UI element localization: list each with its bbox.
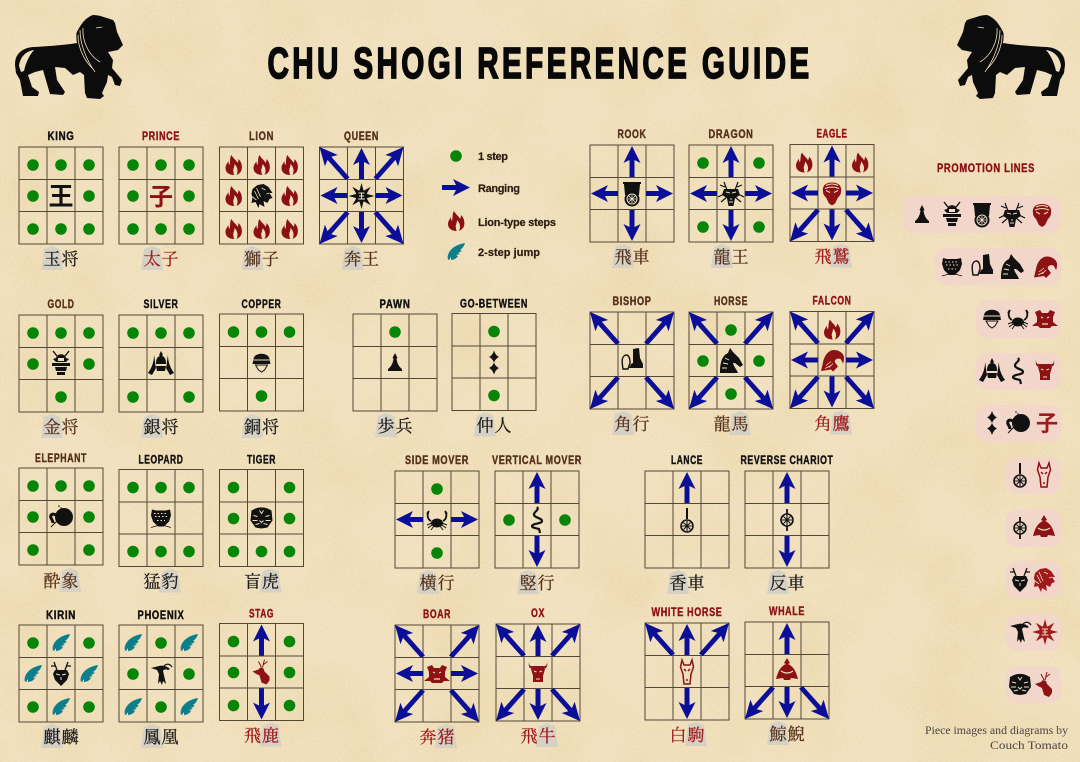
promotion line 7 <box>1006 509 1061 547</box>
panel: Lion: 子 <box>262 250 279 269</box>
panel: Whale: WHALE <box>769 606 805 618</box>
panel: Dragon <box>689 129 773 268</box>
panel: Boar: 奔 <box>420 728 436 747</box>
panel: Prince: PRINCE <box>142 131 180 143</box>
title: CHU SHOGI REFERENCE GUIDE <box>268 39 812 88</box>
panel: Go-between <box>452 298 536 436</box>
panel: Prince: 子 <box>162 250 178 269</box>
panel: Gold: 将 <box>62 418 78 437</box>
panel: Rook <box>590 129 674 268</box>
panel: Lion: 獅 <box>244 250 261 269</box>
panel: Stag <box>220 608 304 746</box>
panel: Silver: SILVER <box>144 299 178 311</box>
panel: Go-between: 仲 <box>476 416 494 436</box>
panel: Lance <box>645 455 729 594</box>
panel: Pawn <box>353 299 437 437</box>
panel: Horse <box>689 296 773 435</box>
panel: Kirin: 麟 <box>62 728 78 747</box>
panel: Lion <box>220 131 304 270</box>
promotion line 5 <box>976 405 1061 442</box>
promotion line 4 <box>976 353 1061 390</box>
promotion line 8 <box>1006 561 1061 598</box>
promotion line 1 <box>903 196 1061 233</box>
panel: Vertical Mover <box>492 455 582 594</box>
panel: Vertical Mover: 行 <box>538 574 554 593</box>
panel: Gold <box>19 299 103 438</box>
panel: Rook: ROOK <box>618 129 646 141</box>
panel: Kirin: 麒 <box>44 728 62 747</box>
panel: Leopard: LEOPARD <box>138 454 184 466</box>
panel: Falcon: 角 <box>814 414 832 434</box>
credit text: Couch Tomato <box>990 738 1068 752</box>
panel: Prince <box>119 131 203 270</box>
panel: Ox: OX <box>531 608 545 620</box>
panel: Prince: 子 <box>149 177 173 212</box>
panel: King: KING <box>48 131 74 143</box>
panel: Vertical Mover: 竪 <box>520 574 536 593</box>
panel: Bishop <box>590 296 674 435</box>
promotion line 5: 子 <box>1036 406 1058 438</box>
panel: Whale <box>745 606 829 745</box>
promotion line 3 <box>976 300 1061 338</box>
panel: White Horse <box>645 607 729 746</box>
panel: Queen <box>320 131 404 270</box>
panel: Boar: 猪 <box>438 728 454 747</box>
panel: Leopard <box>119 454 203 592</box>
panel: Kirin: KIRIN <box>46 610 76 622</box>
panel: Leopard: 猛 <box>144 572 160 592</box>
panel: Whale: 鯢 <box>788 725 804 744</box>
panel: Copper <box>220 299 304 438</box>
panel: Vertical Mover: VERTICAL MOVER <box>492 455 582 467</box>
credit text <box>925 723 1068 752</box>
panel: Copper: 将 <box>262 418 279 437</box>
panel: Horse: 龍 <box>714 415 730 434</box>
panel: Rook: 車 <box>632 248 650 267</box>
legend: 2-step jump: 2-step jump <box>478 247 540 259</box>
panel: Pawn: 兵 <box>396 417 412 436</box>
panel: Bishop: 行 <box>632 415 650 434</box>
panel: Bishop: 角 <box>614 415 632 434</box>
panel: Boar <box>395 609 479 748</box>
panel: Dragon: 龍 <box>714 248 730 267</box>
panel: Eagle: EAGLE <box>816 128 848 140</box>
panel: Eagle: 飛 <box>814 248 832 266</box>
legend: ranging: Ranging <box>478 183 520 195</box>
panel: Lance: 車 <box>688 574 704 593</box>
panel: promotion lines <box>903 163 1061 703</box>
panel: Stag: 飛 <box>244 726 261 746</box>
panel: Kirin <box>19 610 103 748</box>
panel: Reverse Chariot: 車 <box>788 574 804 593</box>
panel: Reverse Chariot: 反 <box>770 574 786 593</box>
panel: Lance: 香 <box>670 574 686 593</box>
promotion line 2 <box>935 248 1061 285</box>
panel: Horse: HORSE <box>714 296 748 308</box>
panel: Bishop: BISHOP <box>612 296 652 308</box>
panel: White Horse: 白 <box>670 726 686 745</box>
panel: Phoenix: 鳳 <box>144 728 160 747</box>
panel: Elephant: 酔 <box>44 572 60 591</box>
panel: Eagle: 鷲 <box>832 248 850 266</box>
panel: Rook: 飛 <box>614 248 632 267</box>
panel: Lance: LANCE <box>671 455 703 467</box>
panel: Phoenix: 凰 <box>162 728 178 747</box>
panel: Phoenix: PHOENIX <box>138 610 184 622</box>
panel: Side Mover <box>395 455 479 594</box>
panel: Falcon <box>790 296 874 434</box>
panel: Ox <box>496 608 580 747</box>
panel: Queen: QUEEN <box>344 131 379 143</box>
panel: Ox: 牛 <box>538 727 556 746</box>
panel: Copper: COPPER <box>242 299 282 311</box>
panel: Elephant: 象 <box>62 572 78 591</box>
panel: Dragon: 王 <box>732 248 748 267</box>
panel: Falcon: FALCON <box>812 296 852 308</box>
panel: Prince: 太 <box>144 250 160 269</box>
panel: Falcon: 鷹 <box>832 414 850 434</box>
panel: Eagle <box>790 128 874 268</box>
heading: promotion lines: PROMOTION LINES <box>937 163 1035 175</box>
panel: White Horse: WHITE HORSE <box>652 607 722 619</box>
panel: Silver <box>119 299 203 438</box>
promotion line 9 <box>1006 614 1061 651</box>
legend: lion-type steps: Lion-type steps <box>478 217 556 229</box>
panel: Lion: LION <box>249 131 274 143</box>
panel: Pawn: PAWN <box>380 299 410 311</box>
panel: Queen: 奔 <box>344 250 361 269</box>
panel: King <box>19 131 103 270</box>
panel: Copper: 銅 <box>244 418 261 437</box>
panel: Whale: 鯨 <box>770 725 788 744</box>
promotion line 6 <box>1006 457 1061 494</box>
panel: Side Mover: 横 <box>420 574 436 593</box>
panel: Leopard: 豹 <box>162 572 178 592</box>
panel: Reverse Chariot: REVERSE CHARIOT <box>740 455 834 467</box>
panel: Tiger: TIGER <box>247 454 276 466</box>
legend: 1 step: 1 step <box>478 151 508 163</box>
icon: left lion <box>15 15 123 99</box>
panel: Silver: 将 <box>162 418 178 437</box>
panel: Ox: 飛 <box>520 727 538 746</box>
panel: Boar: BOAR <box>423 609 451 621</box>
panel: King: 王 <box>48 177 74 213</box>
icon: right lion <box>957 15 1065 99</box>
promotion line 10 <box>1006 666 1061 703</box>
panel: Side Mover: SIDE MOVER <box>405 455 469 467</box>
panel: Gold: GOLD <box>48 299 74 311</box>
panel: Stag: STAG <box>249 608 274 620</box>
panel: Horse: 馬 <box>732 415 748 434</box>
credit text: Piece images and diagrams by <box>925 723 1068 737</box>
panel: White Horse: 駒 <box>686 726 704 745</box>
panel: Go-between: 人 <box>494 416 512 436</box>
panel: Silver: 銀 <box>144 418 160 437</box>
panel: King: 将 <box>62 250 78 269</box>
panel: Tiger: 虎 <box>262 572 279 592</box>
legend <box>442 150 556 260</box>
panel: Queen: 王 <box>362 250 379 269</box>
panel: Reverse Chariot <box>740 455 834 594</box>
panel: Go-between: GO-BETWEEN <box>460 298 528 310</box>
panel: Side Mover: 行 <box>438 574 454 593</box>
panel: Phoenix <box>119 610 203 748</box>
panel: Pawn: 歩 <box>378 416 394 436</box>
panel: Stag: 鹿 <box>262 726 279 746</box>
panel: Elephant: ELEPHANT <box>35 453 87 465</box>
panel: Gold: 金 <box>44 418 60 437</box>
panel: King: 玉 <box>44 250 60 269</box>
panel: Tiger: 盲 <box>244 572 261 592</box>
panel: Dragon: DRAGON <box>708 129 754 141</box>
panel: Tiger <box>220 454 304 592</box>
panel: Elephant <box>19 453 103 592</box>
